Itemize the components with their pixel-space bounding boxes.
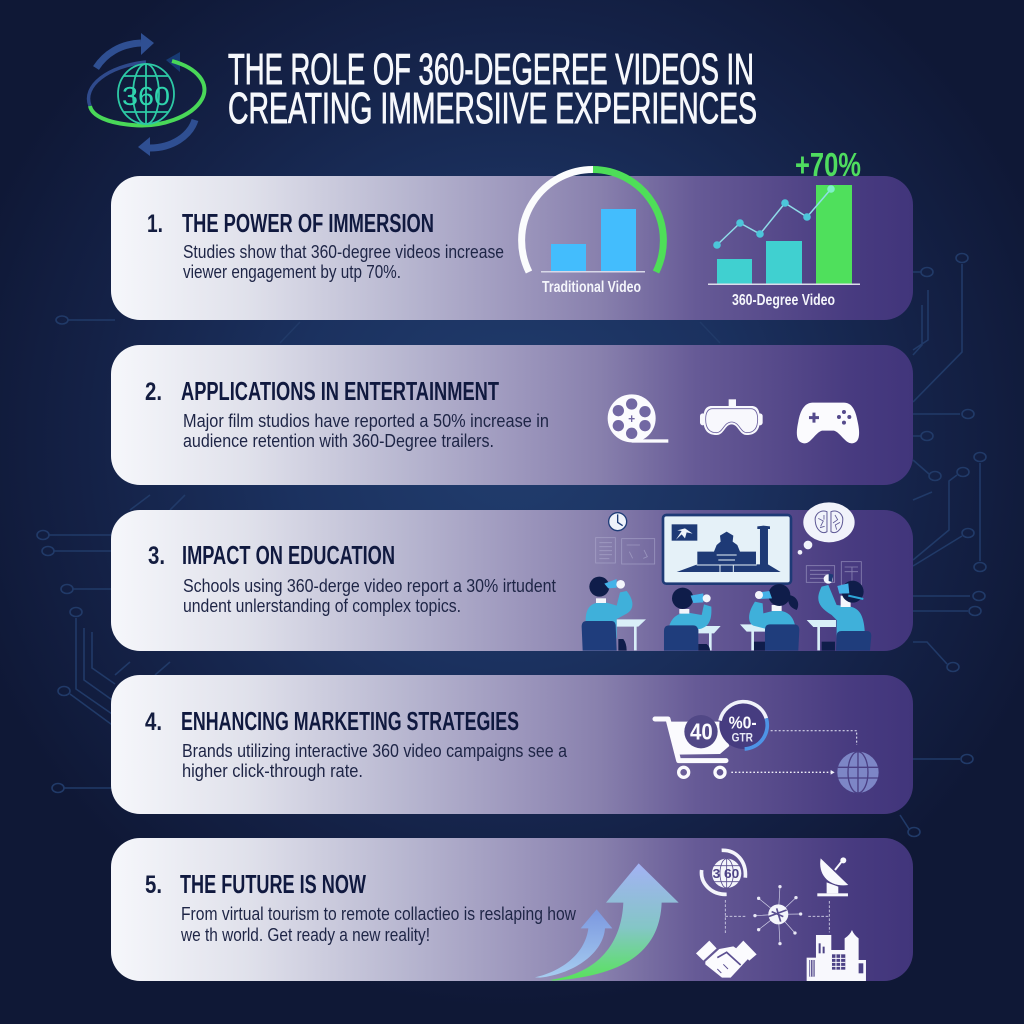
body text 4 <box>182 740 568 781</box>
chart: 360-degree video bars and line: +70% <box>795 146 861 183</box>
icon: clock <box>609 513 627 531</box>
body text 1: viewer engagement by utp 70%. <box>183 261 401 282</box>
body text 1 <box>183 241 504 282</box>
icon: 360 globe logo: 360 <box>122 81 170 111</box>
body text 2 <box>183 410 549 451</box>
student 3 <box>740 584 799 651</box>
number 4: 4. <box>145 708 162 736</box>
heading 4: ENHANCING MARKETING STRATEGIES <box>181 706 519 736</box>
icon: shopping cart with 40 percent CTR badge: GTR <box>732 730 753 744</box>
icon: 360 globe <box>701 850 745 894</box>
panel: the future is now <box>111 838 913 981</box>
chart: traditional video gauge and bars: Traditional Video <box>542 279 641 296</box>
body text 2: audience retention with 360-Degree trailers. <box>183 430 494 451</box>
student 4 <box>807 573 871 651</box>
chart: 360-degree video bars and line: 360-Degree Video <box>732 292 835 309</box>
heading 3: IMPACT ON EDUCATION <box>182 540 395 570</box>
thought bubble with brain <box>798 502 855 555</box>
icon: 360 globe logo <box>89 33 204 156</box>
body text 3: Schools using 360-derge video report a 30% irtudent <box>183 575 556 596</box>
icon: VR goggles <box>700 399 763 435</box>
chart: 360-degree video bars and line <box>708 146 861 309</box>
growth arrows <box>535 863 679 981</box>
body text 5: From virtual tourism to remote collactieo is reslaping how <box>181 903 577 924</box>
body text 3: undent unlerstanding of complex topics. <box>183 595 461 616</box>
number 1: 1. <box>147 210 163 238</box>
panel: impact on education <box>111 502 913 651</box>
icon: central hub <box>725 885 830 945</box>
body text 1: Studies show that 360-degree videos increase <box>183 241 504 262</box>
wall notes <box>596 538 861 585</box>
icon: shopping cart with 40 percent CTR badge: 40 <box>690 719 713 745</box>
student 2 <box>664 588 721 651</box>
number 3: 3. <box>148 542 165 570</box>
title <box>228 45 757 133</box>
chart: traditional video gauge and bars <box>522 169 663 296</box>
body text 4: Brands utilizing interactive 360 video campaigns see a <box>182 740 568 761</box>
icon: satellite dish <box>817 857 848 896</box>
body text 4: higher click-through rate. <box>182 760 363 781</box>
body text 2: Major film studios have reported a 50% increase in <box>183 410 549 431</box>
network of future icons <box>696 850 866 981</box>
number 2: 2. <box>145 378 162 406</box>
panel: enhancing marketing strategies <box>111 675 913 814</box>
icon: 360 globe: 3 60 <box>713 867 739 881</box>
icon: shopping cart with 40 percent CTR badge: %0- <box>729 712 757 732</box>
projection screen <box>663 515 791 584</box>
icon: film reel <box>608 394 668 443</box>
heading 2: APPLICATIONS IN ENTERTAINMENT <box>181 376 499 406</box>
body text 5: we th world. Get ready a new reality! <box>180 924 430 945</box>
body text 3 <box>183 575 556 616</box>
heading 1: THE POWER OF IMMERSION <box>182 208 434 238</box>
icon: handshake <box>696 941 757 978</box>
illustration: classroom with VR students <box>582 502 871 651</box>
icon: game controller <box>797 403 859 443</box>
circuit pattern background <box>37 254 986 836</box>
number 5: 5. <box>145 871 162 899</box>
body text 5 <box>180 903 577 945</box>
icon: shopping cart with 40 percent CTR badge <box>655 701 879 793</box>
heading 5: THE FUTURE IS NOW <box>180 869 366 899</box>
panel: the power of immersion <box>111 146 913 320</box>
student 1 <box>582 577 646 651</box>
panel: applications in entertainment <box>111 345 913 485</box>
icon: city skyline <box>807 930 866 981</box>
